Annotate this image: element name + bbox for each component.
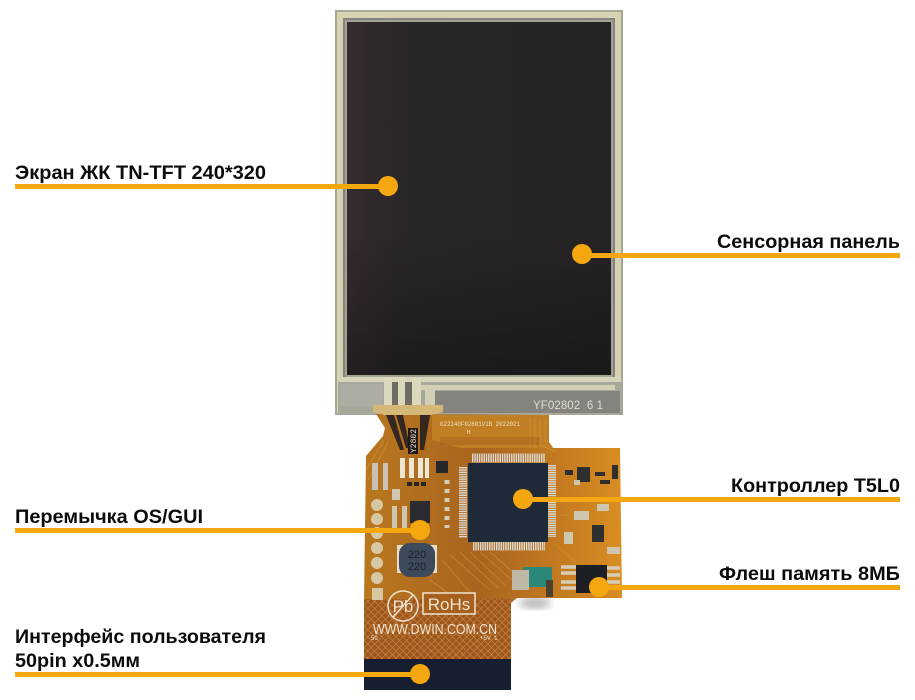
callout: user interface: Интерфейс пользователя — [15, 626, 266, 648]
inductor 220: 220 — [408, 561, 426, 573]
teal component — [523, 567, 552, 587]
callout: user interface — [15, 626, 430, 684]
Pb free mark — [388, 591, 418, 621]
small SMD group upper right — [565, 465, 618, 542]
upper gold strip — [432, 415, 553, 448]
callout: jumper: Перемычка OS/GUI — [15, 506, 203, 528]
routed traces — [366, 418, 612, 598]
callout: LCD screen — [15, 162, 398, 196]
panel marking: YF02802 6 1 — [533, 400, 603, 412]
LCD screen — [347, 22, 611, 375]
pads near connector — [400, 458, 429, 478]
vertical SMD row — [444, 480, 450, 528]
T5L0 chip — [463, 458, 552, 546]
callout: touch panel: Сенсорная панель — [717, 231, 900, 253]
flexible printed circuit board — [364, 405, 622, 690]
solder pads column — [371, 499, 383, 600]
ribbon parts on left — [372, 463, 388, 490]
silver traces to connector — [392, 382, 412, 406]
callout: jumper — [15, 506, 430, 540]
callout: LCD screen: Экран ЖК TN-TFT 240*320 — [15, 162, 266, 184]
touch panel with LCD screen — [335, 10, 623, 415]
MOSFET — [410, 501, 430, 523]
pin numbers: 50 — [371, 636, 378, 642]
website text: WWW.DWIN.COM.CN — [373, 621, 497, 638]
inductor 220: 220 — [408, 549, 426, 561]
callout: controller: Контроллер T5L0 — [731, 475, 900, 497]
callout: user interface: 50pin x0.5мм — [15, 650, 140, 672]
inductor 220 — [397, 543, 437, 577]
silkscreen lot text: G2224OF02801V1B 2022021 — [440, 421, 520, 428]
callout: flash memory: Флеш память 8МБ — [719, 563, 900, 585]
rotated part number: Y2802 — [410, 429, 419, 453]
board shadow — [519, 597, 551, 609]
small components left — [392, 489, 407, 528]
Pb free mark: Pb — [393, 597, 413, 616]
flexible printed circuit board: H — [467, 429, 471, 436]
lower film strip — [338, 382, 621, 414]
hatched tail — [364, 599, 511, 660]
tail connector — [364, 659, 511, 690]
connector tabs — [373, 405, 443, 415]
flash chip — [561, 565, 620, 593]
transistor — [436, 461, 448, 473]
RoHS mark: RoHs — [428, 595, 470, 614]
callout: touch panel — [572, 231, 900, 264]
callout: controller — [513, 475, 900, 509]
lower cream band — [338, 377, 621, 382]
callout: flash memory — [589, 563, 900, 597]
pin numbers right: +5V 1 — [480, 636, 498, 642]
